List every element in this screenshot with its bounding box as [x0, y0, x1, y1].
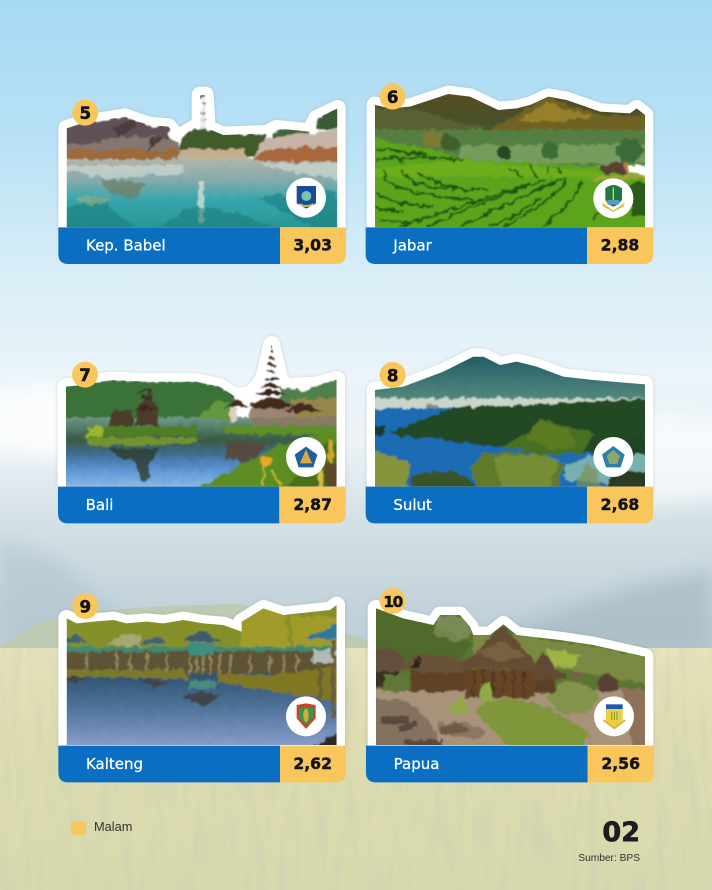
name bar: Sulut — [366, 487, 587, 523]
photo: Kalteng boardwalk lake — [66, 605, 337, 745]
card: Kalteng — [58, 593, 346, 782]
value box: 2,56 — [588, 746, 654, 782]
card outline — [66, 344, 337, 487]
label: Kalteng: Kalteng — [86, 755, 143, 773]
legend: Malam — [71, 819, 132, 835]
label: Bali: Bali — [86, 496, 113, 514]
rank badge: 10: 10 — [383, 593, 403, 611]
card: Papua — [366, 588, 654, 782]
card: Sulut — [366, 353, 653, 523]
rank badge: 7 — [72, 362, 98, 388]
name bar: Bali — [58, 487, 279, 523]
rank badge: 9: 9 — [80, 597, 91, 616]
logo: Bali emblem — [286, 437, 326, 477]
value: 2,56: 2,56 — [601, 754, 640, 773]
label: Papua: Papua — [394, 755, 439, 773]
photo: Papua honai huts — [376, 608, 645, 745]
name bar: Jabar — [366, 227, 587, 264]
photo: Bali lake temple — [60, 344, 343, 493]
rank badge: 5: 5 — [80, 104, 91, 123]
logo: Papua emblem — [594, 696, 634, 736]
card: Bali — [58, 344, 346, 523]
value: 2,88: 2,88 — [601, 236, 639, 255]
card outline — [375, 94, 645, 227]
page number: 02 — [602, 817, 640, 848]
card: Kep. Babel — [58, 95, 346, 264]
legend swatch — [71, 821, 86, 835]
rank badge: 10 — [380, 588, 406, 614]
rank badge: 9 — [72, 593, 98, 619]
photo: Sulut volcano and bay — [375, 356, 645, 486]
name bar: Papua — [366, 746, 588, 782]
card outline — [67, 95, 337, 227]
rank badge: 5 — [72, 100, 98, 126]
photo: Kep. Babel rocks and lighthouse — [60, 95, 343, 233]
label: Sulut: Sulut — [393, 496, 432, 514]
legend label: Malam — [94, 819, 132, 834]
rank badge: 8 — [380, 362, 406, 388]
value box: 3,03 — [280, 227, 346, 264]
rank badge: 6 — [380, 84, 406, 110]
value: 2,87: 2,87 — [293, 495, 332, 514]
photo: Jabar tea terraces — [375, 94, 645, 228]
logo: Kep. Babel emblem — [286, 178, 326, 218]
logo: Sulut emblem — [593, 437, 633, 477]
card outline — [375, 357, 645, 487]
value: 2,62: 2,62 — [293, 754, 332, 773]
value box: 2,62 — [280, 746, 346, 782]
value box: 2,87 — [279, 487, 346, 523]
value: 2,68: 2,68 — [601, 495, 639, 514]
logo: Kalteng emblem — [286, 696, 326, 736]
card outline — [376, 608, 645, 745]
value: 3,03: 3,03 — [293, 236, 332, 255]
label: Jabar: Jabar — [392, 237, 433, 255]
card: Jabar — [366, 84, 653, 264]
rank badge: 6: 6 — [387, 88, 398, 107]
label: Kep. Babel: Kep. Babel — [86, 237, 166, 255]
value box: 2,68 — [587, 487, 653, 523]
rank badge: 8: 8 — [387, 366, 398, 385]
name bar: Kep. Babel — [58, 227, 280, 264]
source: Sumber: BPS — [578, 853, 640, 864]
rank badge: 7: 7 — [79, 366, 91, 385]
name bar: Kalteng — [58, 746, 280, 782]
card outline — [67, 605, 337, 745]
logo: Jabar emblem — [593, 178, 633, 218]
value box: 2,88 — [587, 227, 653, 264]
